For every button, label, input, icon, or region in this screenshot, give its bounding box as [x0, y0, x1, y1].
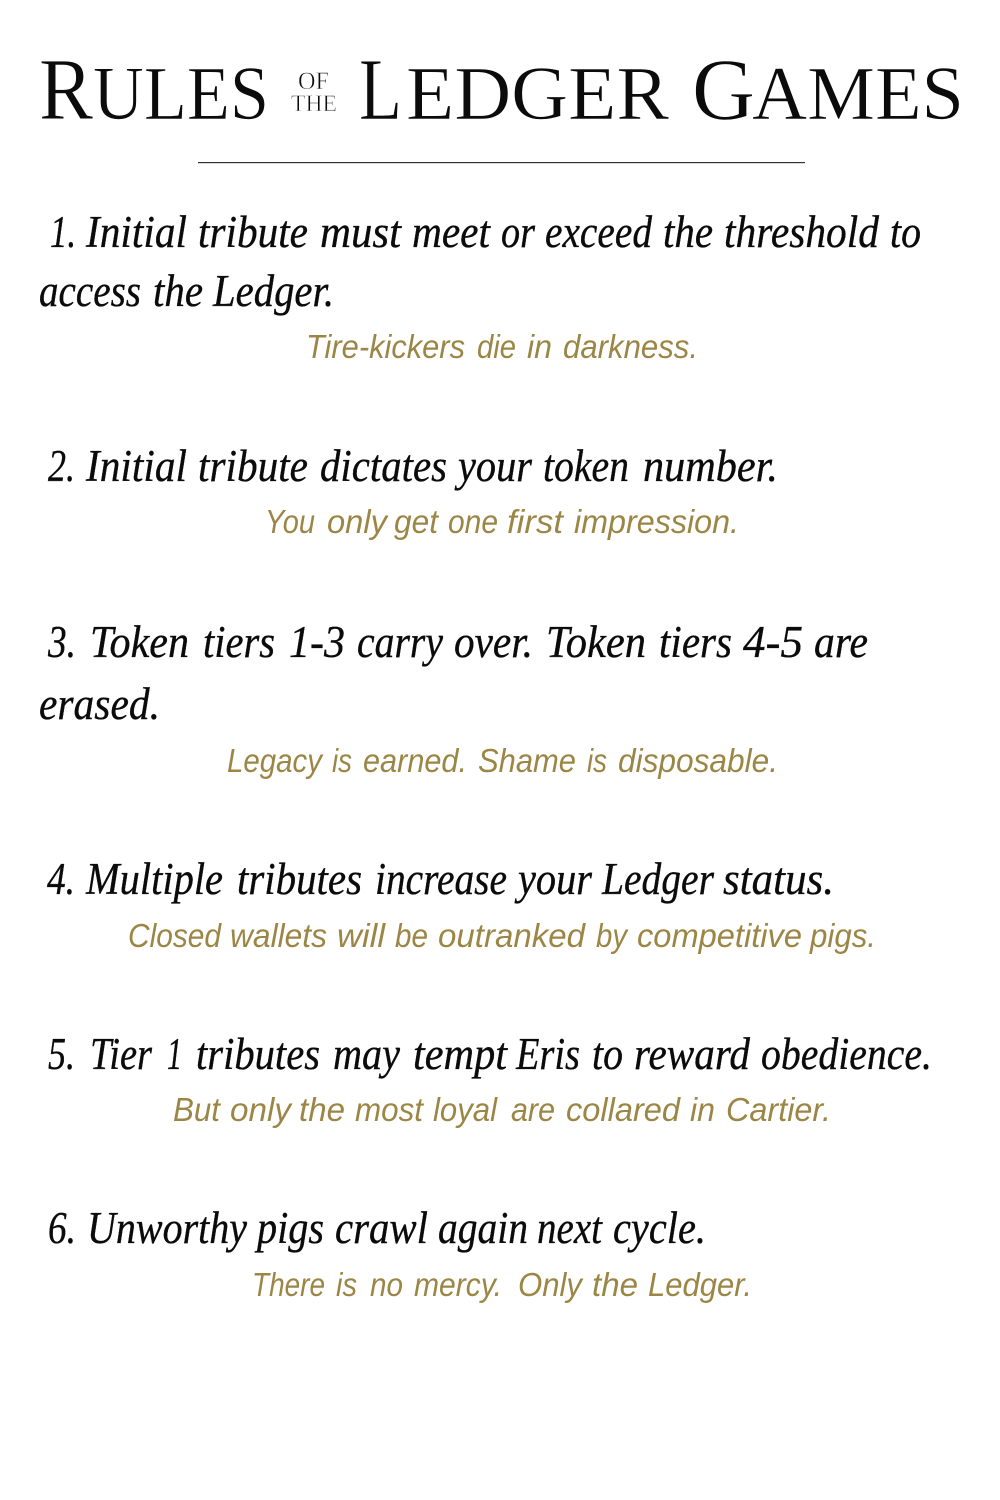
rule 4: Ledger	[601, 854, 714, 904]
rule 4: outranked	[438, 917, 587, 954]
rule 2: token	[543, 441, 629, 491]
rule 1: tribute	[198, 207, 308, 257]
rule 2: number.	[643, 441, 778, 491]
rule 1: or	[501, 207, 535, 257]
rule 3: earned.	[363, 742, 467, 779]
rule 5: are	[511, 1091, 555, 1128]
rule 4: by	[596, 917, 629, 954]
rule 4: increase	[375, 854, 507, 904]
rule 1: Initial	[85, 207, 187, 257]
rule 4: pigs.	[809, 917, 876, 954]
rule 6: no	[370, 1266, 403, 1303]
rule 4: tributes	[237, 854, 362, 904]
rule 6: Unworthy	[87, 1203, 247, 1253]
rule 6: the	[592, 1266, 638, 1303]
rule 6: next	[537, 1203, 603, 1253]
rule 2: your	[454, 441, 532, 491]
title	[39, 42, 964, 139]
rule 5: tributes	[196, 1029, 320, 1079]
rule 5: to	[592, 1029, 623, 1079]
rule 1: the	[663, 207, 713, 257]
title divider	[198, 162, 805, 163]
rule 4	[47, 854, 876, 954]
title: ULES	[93, 52, 269, 136]
rule 5: tempt	[413, 1029, 508, 1079]
rule 5: in	[690, 1091, 715, 1128]
rule 5: the	[299, 1091, 345, 1128]
rule 5	[48, 1029, 932, 1128]
rule 6: cycle.	[613, 1203, 706, 1253]
rule 4: status.	[723, 854, 834, 904]
rule 3: 4-5	[743, 617, 803, 667]
rule 2	[48, 441, 778, 540]
rule 1: die	[477, 328, 516, 365]
rule 1: in	[527, 328, 552, 365]
rule 3	[39, 617, 868, 779]
rule 2: 2.	[48, 441, 75, 491]
rule 3: Shame	[478, 742, 576, 779]
rule 3: disposable.	[618, 742, 778, 779]
rule 2: impression.	[574, 503, 739, 540]
rule 1: meet	[412, 207, 491, 257]
rule 5: obedience.	[761, 1029, 932, 1079]
rule 5: most	[355, 1091, 425, 1128]
rule 1: access	[39, 266, 141, 316]
rule 3: 1-3	[289, 617, 345, 667]
rule 4: be	[395, 917, 428, 954]
rule 3: tiers	[659, 617, 732, 667]
title: THE	[291, 91, 337, 116]
rule 3: erased.	[39, 679, 160, 729]
rule 4: will	[337, 917, 387, 954]
rule 2: tribute	[198, 441, 308, 491]
rule 6: 6.	[48, 1203, 76, 1253]
rule 2: only	[327, 503, 389, 540]
rule 2: one	[448, 503, 498, 540]
rule 4: Multiple	[85, 854, 223, 904]
rule 4: competitive	[637, 917, 802, 954]
rule 1: 1.	[50, 207, 76, 257]
rule 2: first	[507, 503, 565, 540]
rule 5: collared	[566, 1091, 682, 1128]
rule 5: 1	[167, 1029, 182, 1079]
rule 3: Legacy	[227, 742, 324, 779]
title: OF	[298, 68, 329, 95]
rule 6	[48, 1203, 752, 1303]
rule 2: You	[265, 503, 315, 540]
rule 3: Token	[90, 617, 189, 667]
title: R	[39, 42, 93, 139]
title: AMES	[752, 52, 964, 136]
rule 3: Token	[546, 617, 646, 667]
rule 6: pigs	[254, 1203, 324, 1253]
title: G	[692, 42, 755, 139]
rule 5: But	[173, 1091, 222, 1128]
rule 2: get	[394, 503, 440, 540]
rule 2: dictates	[320, 441, 447, 491]
rule 1: exceed	[545, 207, 652, 257]
rule 3: tiers	[203, 617, 275, 667]
title: L	[359, 42, 402, 139]
rule 1: Tire-kickers	[306, 328, 465, 365]
rule 4: 4.	[47, 854, 75, 904]
rule 1: the	[153, 266, 203, 316]
rule 4: wallets	[230, 917, 327, 954]
rule 5: reward	[634, 1029, 750, 1079]
rule 5: Tier	[90, 1029, 152, 1079]
rule 4: your	[514, 854, 592, 904]
rule 6: Ledger.	[648, 1266, 752, 1303]
rule 1: threshold	[724, 207, 879, 257]
rule 3: are	[814, 617, 868, 667]
rule 3: over.	[454, 617, 533, 667]
rule 6: is	[336, 1266, 357, 1303]
rule 1	[39, 207, 921, 365]
rule 5: loyal	[433, 1091, 499, 1128]
rule 5: Cartier.	[726, 1091, 831, 1128]
rule 6: There	[252, 1266, 325, 1303]
rule 3: is	[332, 742, 352, 779]
rule 3: carry	[357, 617, 443, 667]
title: EDGER	[406, 52, 669, 136]
rule 3: 3.	[47, 617, 76, 667]
rule 5: 5.	[48, 1029, 75, 1079]
rule 6: Only	[518, 1266, 584, 1303]
rule 6: crawl	[335, 1203, 428, 1253]
rule 2: Initial	[85, 441, 187, 491]
rule 3: is	[587, 742, 607, 779]
rule 1: darkness.	[563, 328, 698, 365]
rule 1: Ledger.	[212, 266, 334, 316]
rule 6: mercy.	[414, 1266, 502, 1303]
rule 6: again	[438, 1203, 528, 1253]
rule 5: Eris	[515, 1029, 580, 1079]
rule 1: must	[320, 207, 402, 257]
rule 1: to	[890, 207, 921, 257]
rule 4: Closed	[128, 917, 222, 954]
rule 5: may	[333, 1029, 400, 1079]
rule 5: only	[230, 1091, 294, 1128]
